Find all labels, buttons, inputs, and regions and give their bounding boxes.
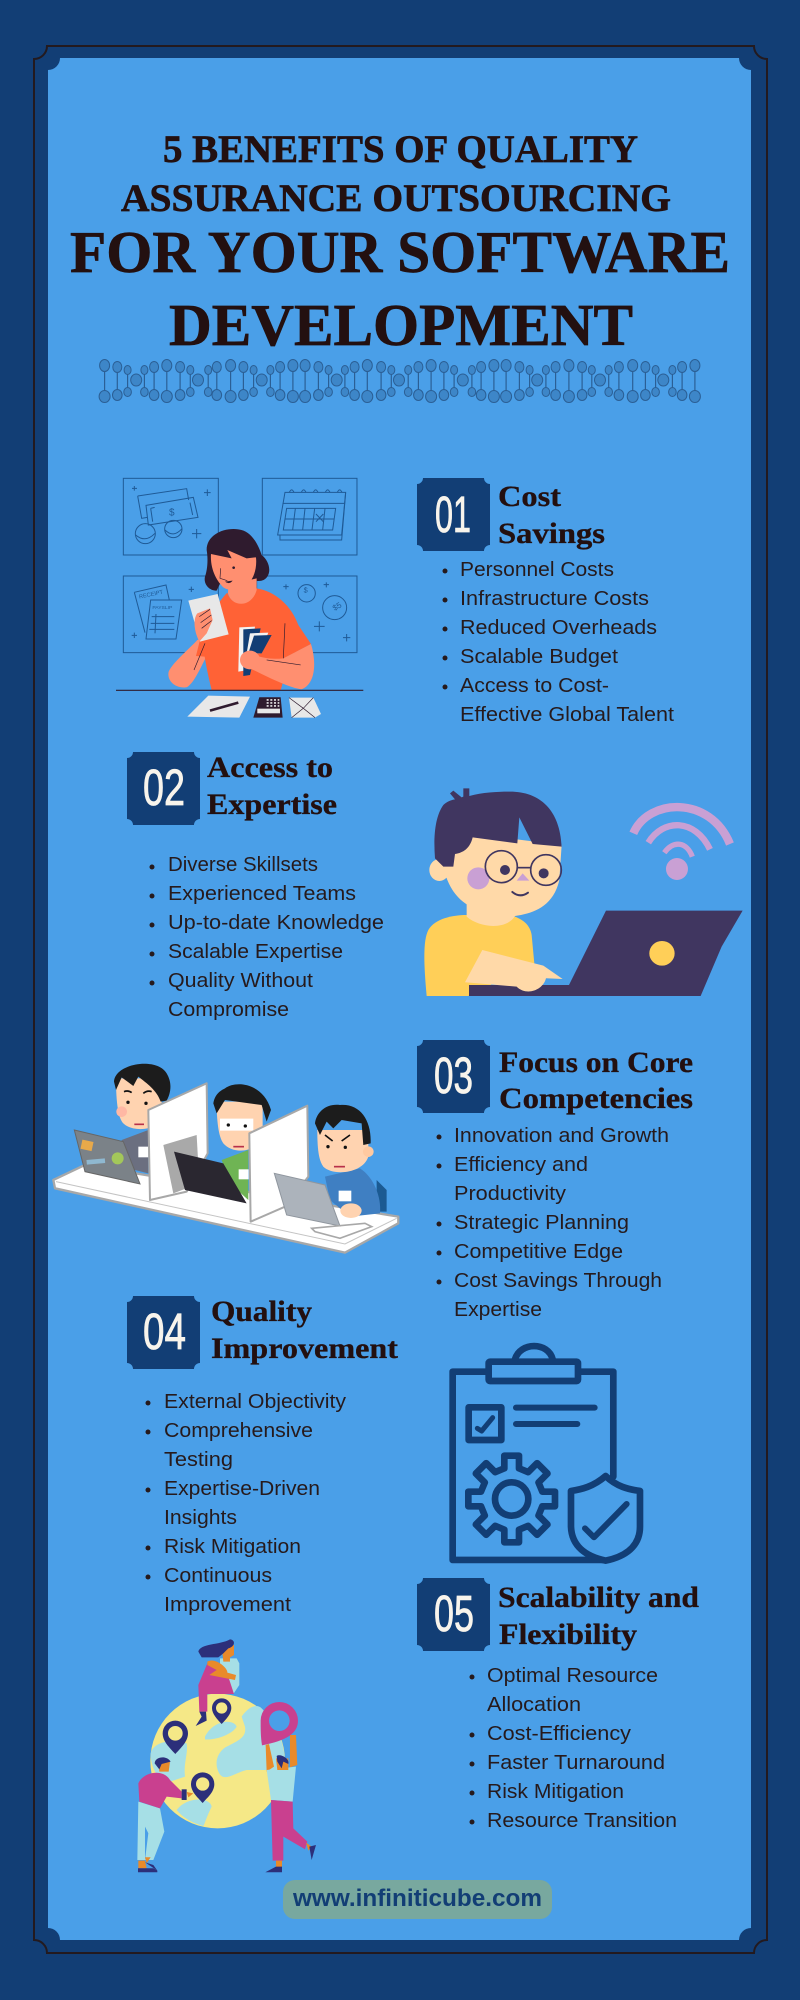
heading 04: Quality: [211, 1295, 312, 1328]
bullet list 04: Comprehensive: [164, 1420, 313, 1442]
bullet list 03: Innovation and Growth: [454, 1125, 669, 1147]
bullet list 01: [442, 559, 674, 726]
bullet list 01: Personnel Costs: [460, 559, 614, 581]
badge 04: 04: [143, 1303, 186, 1360]
illustration: woman reviewing receipts: $5: [331, 600, 344, 613]
bullet list 05: Faster Turnaround: [487, 1752, 665, 1774]
heading 05: Flexibility: [499, 1618, 637, 1651]
heading 02: Expertise: [207, 788, 337, 821]
heading 03: Competencies: [499, 1082, 693, 1115]
bullet list 02: Up-to-date Knowledge: [168, 912, 384, 934]
heading 02: Access to: [207, 751, 333, 784]
worker 1: [122, 1130, 148, 1173]
heading 04: [211, 1295, 398, 1365]
bullet list 02: Quality Without: [168, 970, 313, 992]
bullet list 04: Continuous: [164, 1565, 272, 1587]
heading 05: [498, 1581, 699, 1651]
website pill: [283, 1880, 552, 1919]
badge 04: [127, 1296, 200, 1369]
section 04: quality improvement: [127, 1295, 398, 1616]
bullet list 05: [470, 1665, 677, 1832]
badge 02: 02: [143, 759, 185, 816]
desk: [53, 1165, 398, 1253]
bullet list 02: [150, 854, 384, 1021]
bullet list 02: Compromise: [168, 999, 289, 1021]
bullet list 02: Experienced Teams: [168, 883, 356, 905]
bullet list 04: Insights: [164, 1507, 237, 1529]
badge 01: 01: [435, 486, 471, 543]
illustration: woman reviewing receipts: RECEIPT: [138, 590, 164, 601]
table line: [116, 689, 363, 692]
title: 5 BENEFITS OF QUALITY: [163, 128, 638, 171]
heading 01: Savings: [498, 517, 605, 550]
bullet list 04: Expertise-Driven: [164, 1478, 320, 1500]
bullet list 01: Scalable Budget: [460, 646, 618, 668]
woman sitting on top: [220, 1658, 239, 1694]
title: [70, 128, 730, 358]
section 02: access to expertise: [127, 751, 384, 1021]
bullet list 04: Testing: [164, 1449, 233, 1471]
bullet list 01: Access to Cost-: [460, 675, 609, 697]
right arm: [242, 644, 314, 689]
partition 1: [148, 1083, 208, 1200]
section 05: scalability and flexibility: [417, 1578, 699, 1832]
heading 03: [499, 1046, 693, 1115]
bullet list 03: Productivity: [454, 1183, 566, 1205]
illustration: people around a globe with map pins: [137, 1639, 316, 1872]
heading 03: Focus on Core: [499, 1046, 693, 1079]
title: ASSURANCE OUTSOURCING: [121, 177, 671, 220]
globe: [150, 1694, 285, 1828]
website pill: www.infiniticube.com: [292, 1885, 542, 1912]
icon: clipboard with gear and shield: [453, 1346, 640, 1561]
illustration: woman reviewing receipts: $: [169, 507, 175, 518]
cards in hand: [238, 627, 255, 672]
bullet list 05: Resource Transition: [487, 1810, 677, 1832]
neck: [228, 578, 257, 604]
bullet list 03: [436, 1125, 669, 1321]
bullet list 04: Improvement: [164, 1594, 291, 1616]
bullet list 05: Cost-Efficiency: [487, 1723, 631, 1745]
document in hand: [188, 594, 229, 642]
left arm: [168, 637, 210, 687]
illustration: three workers at desks: [53, 1064, 398, 1253]
badge 03: 03: [434, 1047, 473, 1104]
badge 05: 05: [434, 1585, 474, 1642]
title: FOR YOUR SOFTWARE: [70, 219, 730, 285]
bullet list 05: Risk Mitigation: [487, 1781, 624, 1803]
worker 3: [377, 1180, 387, 1212]
bullet list 05: Optimal Resource: [487, 1665, 658, 1687]
illustration: woman reviewing receipts: PAYSLIP: [152, 605, 173, 611]
bullet list 03: Strategic Planning: [454, 1212, 629, 1234]
bullet list 01: Reduced Overheads: [460, 617, 657, 639]
bullet list 04: Risk Mitigation: [164, 1536, 301, 1558]
partition 2: [249, 1106, 308, 1222]
decorative DNA strand: [99, 360, 700, 402]
pins: [212, 1698, 231, 1724]
bullet list 03: Cost Savings Through: [454, 1270, 662, 1292]
badge 02: [127, 752, 200, 825]
illustration: woman reviewing receipts: [116, 478, 363, 718]
bullet list 02: Scalable Expertise: [168, 941, 343, 963]
bullet list 02: Diverse Skillsets: [168, 854, 318, 876]
illustration: boy with laptop and wifi: [424, 788, 743, 996]
section 01: cost savings: [417, 478, 674, 726]
hair: [205, 529, 269, 591]
bullet list 05: Allocation: [487, 1694, 581, 1716]
worker 2: [222, 1150, 248, 1200]
bullet list 01: Infrastructure Costs: [460, 588, 649, 610]
heading 04: Improvement: [211, 1332, 398, 1365]
badge 01: [417, 478, 490, 551]
shirt: [196, 588, 311, 690]
bullet list 03: Competitive Edge: [454, 1241, 623, 1263]
heading 02: [207, 751, 337, 821]
illustration: woman reviewing receipts: $: [304, 586, 308, 595]
face: [211, 550, 256, 590]
man on right: [266, 1744, 274, 1772]
title: DEVELOPMENT: [169, 292, 633, 358]
heading 01: [498, 480, 605, 550]
bullet list 01: Effective Global Talent: [460, 704, 674, 726]
badge 05: [417, 1578, 490, 1651]
bullet list 03: Efficiency and: [454, 1154, 588, 1176]
bullet list 04: [146, 1391, 346, 1616]
bullet list 03: Expertise: [454, 1299, 542, 1321]
man on left: [137, 1802, 164, 1860]
heading 05: Scalability and: [498, 1581, 699, 1614]
heading 01: Cost: [498, 480, 561, 513]
section 03: focus on core competencies: [417, 1040, 693, 1321]
bullet list 04: External Objectivity: [164, 1391, 346, 1413]
badge 03: [417, 1040, 490, 1113]
